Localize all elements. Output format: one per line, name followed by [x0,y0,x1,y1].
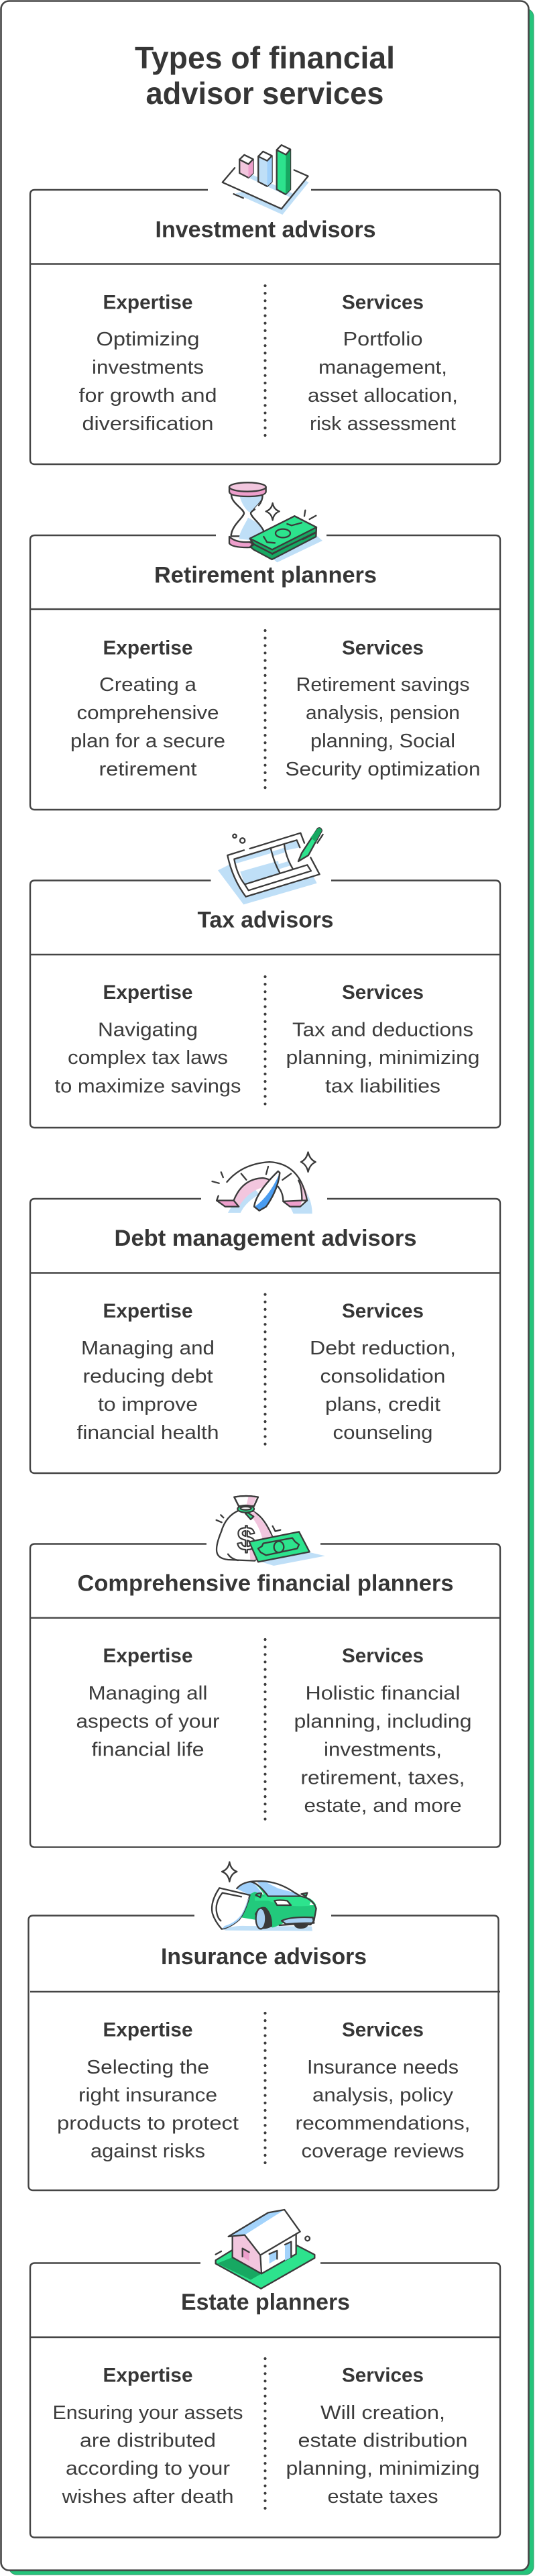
services column: Services [342,1300,424,1322]
services column: consolidation [320,1366,445,1387]
services column: Tax and deductions [292,1020,473,1041]
expertise column: Expertise [103,2019,193,2041]
heading: Investment advisors [156,217,375,243]
expertise column: Creating a [99,674,197,696]
services column: asset allocation, [308,385,458,407]
expertise column: according to your [66,2458,230,2479]
expertise column: to improve [98,1394,198,1415]
services column: estate distribution [298,2430,468,2451]
services column: Services [342,2019,424,2041]
panel: debt management advisors [30,1152,500,1473]
expertise column: Managing all [88,1682,208,1704]
services column: Portfolio [343,329,422,350]
icon: tax form and pen [218,828,323,904]
services column: recommendations, [295,2113,471,2135]
expertise column: Managing and [81,1338,215,1359]
expertise column: products to protect [57,2113,239,2135]
panel: comprehensive financial planners [30,1496,500,1847]
services column: estate, and more [304,1795,461,1817]
services column: Services [342,291,424,314]
expertise column: retirement [99,759,197,780]
expertise column [70,637,225,780]
services column [286,2364,480,2508]
services column: estate taxes [327,2486,438,2508]
heading: Estate planners [181,2290,350,2315]
expertise column [76,1645,220,1760]
panel: retirement planners [30,482,500,810]
icon: bar chart on a tilted sheet [223,145,309,215]
services column: analysis, policy [312,2084,454,2106]
services column: Will creation, [320,2402,445,2424]
services column: Security optimization [286,759,480,780]
icon: car and shield [212,1862,316,1931]
expertise column [79,291,217,435]
expertise column: Ensuring your assets [52,2402,243,2424]
panel: insurance advisors [28,1862,500,2190]
expertise column: Optimizing [97,329,200,350]
expertise column: Expertise [103,1300,193,1322]
expertise column [57,2019,239,2162]
services column: investments, [324,1739,442,1760]
heading: Debt management advisors [114,1226,417,1251]
services column: retirement, taxes, [300,1767,465,1788]
expertise column: for growth and [79,385,217,407]
expertise column: diversification [82,413,213,435]
services column: planning, including [294,1711,472,1733]
services column: planning, Social [310,731,455,752]
services column: Debt reduction, [310,1338,456,1359]
expertise column: Expertise [103,981,193,1004]
title [135,40,395,111]
expertise column: plan for a secure [70,731,225,752]
services column: Services [342,2364,424,2387]
services column: Retirement savings [296,674,469,696]
panel: estate planners [30,2210,500,2537]
services column: plans, credit [325,1394,440,1415]
services column: Holistic financial [306,1682,460,1704]
icon: money bag and banknote [217,1496,325,1566]
expertise column: Expertise [103,637,193,659]
expertise column: Navigating [98,1020,198,1041]
expertise column: investments [92,357,204,378]
services column [310,1300,456,1444]
expertise column [55,981,241,1097]
expertise column: complex tax laws [68,1047,228,1069]
expertise column [76,1300,219,1444]
heading: Comprehensive financial planners [78,1571,453,1597]
expertise column: right insurance [78,2084,217,2106]
heading: Tax advisors [197,908,334,933]
heading: Retirement planners [154,562,377,588]
services column [294,1645,472,1817]
services column: Insurance needs [307,2057,459,2078]
services column: coverage reviews [302,2141,464,2162]
icon: money bag and banknote: $ [237,1521,255,1558]
title: Types of financial [135,40,395,75]
icon: credit score gauge [213,1152,316,1214]
expertise column: Expertise [103,1645,193,1667]
expertise column: Selecting the [86,2057,209,2078]
title: advisor services [146,76,383,111]
panel: investment advisors [30,145,500,464]
expertise column: to maximize savings [55,1075,241,1097]
services column [286,981,480,1097]
services column: management, [318,357,447,378]
expertise column: financial health [76,1422,219,1444]
services column: tax liabilities [325,1075,440,1097]
expertise column: comprehensive [76,702,219,724]
icon: hourglass and stack of cash [229,482,322,562]
services column: planning, minimizing [286,1047,480,1069]
services column [295,2019,471,2162]
services column: Services [342,981,424,1004]
heading: Insurance advisors [161,1944,367,1970]
services column [286,637,480,780]
expertise column: Expertise [103,291,193,314]
services column: counseling [333,1422,433,1444]
icon: isometric house on green lot [216,2210,314,2289]
expertise column: against risks [91,2141,205,2162]
expertise column: wishes after death [61,2486,234,2508]
expertise column: Expertise [103,2364,193,2387]
services column: planning, minimizing [286,2458,480,2479]
services column: risk assessment [310,413,456,435]
services column: Services [342,1645,424,1667]
services column: Services [342,637,424,659]
expertise column: are distributed [80,2430,216,2451]
services column: analysis, pension [306,702,460,724]
expertise column [52,2364,243,2508]
panel: tax advisors [30,828,500,1128]
services column [308,291,458,435]
expertise column: reducing debt [83,1366,213,1387]
expertise column: financial life [91,1739,204,1760]
expertise column: aspects of your [76,1711,220,1733]
